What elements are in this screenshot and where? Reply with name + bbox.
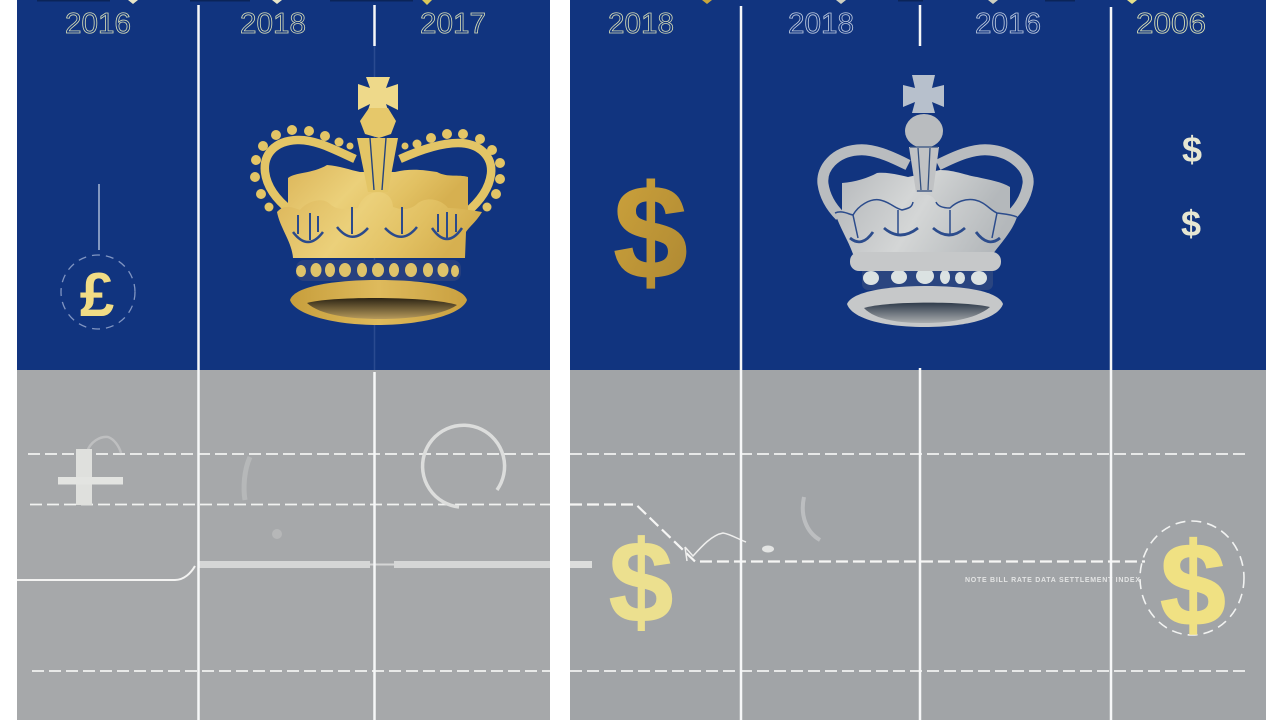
icon: faded plus and arc (58, 437, 123, 505)
faded crescent (803, 497, 820, 540)
icon: gold crown (250, 77, 505, 325)
crown ornaments (835, 199, 1017, 242)
icon: small dollar signs: $ (1181, 203, 1201, 244)
year labels: right panel: 2016 (975, 8, 1041, 40)
crown upper band (850, 252, 1001, 271)
year labels: left panel: 2017 (420, 8, 486, 40)
crown base (290, 280, 467, 325)
column dividers (198, 5, 1111, 720)
crown base (847, 286, 1003, 327)
panel: right comparison (570, 0, 1266, 720)
small caption: NOTE BILL RATE DATA SETTLEMENT INDEX (965, 577, 1140, 584)
crown fluted column (357, 138, 398, 192)
crown body (277, 192, 482, 258)
crown gem band (296, 260, 461, 281)
year labels: right panel: 2018 (788, 8, 854, 40)
crown cross and orb (358, 77, 398, 110)
crown cross and orb (903, 75, 944, 113)
crown cap (842, 170, 1010, 215)
year labels: right panel (608, 8, 1206, 40)
icon: silver crown (823, 75, 1028, 327)
top markers: right panel (702, 0, 1137, 4)
crown arches (265, 140, 355, 211)
icon: pale dollar: $ (609, 517, 673, 647)
squiggle annotation (685, 533, 774, 561)
icon: circled dollar (1140, 519, 1244, 651)
trend line: left panel (17, 561, 550, 580)
crown cap (288, 165, 468, 212)
dashed guide lines: right panel (570, 454, 1248, 671)
stepped dashed trend line (570, 504, 1145, 562)
trend line end cap (570, 561, 592, 568)
crown gem band (862, 266, 993, 290)
icon: small dollar signs: $ (1182, 129, 1202, 170)
top markers: left panel (37, 0, 432, 5)
dashed guide lines: left panel (28, 454, 550, 671)
icon: circled dollar: $ (1160, 519, 1226, 651)
icon: pound coin on a stem (61, 184, 135, 330)
icon: faded ring (423, 425, 505, 507)
year labels: left panel (65, 8, 486, 40)
crown arches (823, 150, 908, 216)
icon: pound coin on a stem: £ (80, 261, 114, 330)
icon: gold dollar: $ (614, 159, 687, 307)
crown ornaments (293, 207, 462, 242)
year labels: right panel: 2006 (1136, 8, 1206, 40)
crown body (835, 194, 1017, 254)
year labels: left panel: 2018 (240, 8, 306, 40)
icon: small dollar signs (1181, 129, 1202, 244)
panel: left comparison (17, 0, 550, 720)
crown pearls (250, 125, 505, 212)
crown column (909, 147, 939, 192)
faded marks: left panel (244, 457, 282, 539)
year labels: right panel: 2018 (608, 8, 674, 40)
faint divider behind crown (374, 46, 376, 370)
year labels: left panel: 2016 (65, 8, 131, 40)
